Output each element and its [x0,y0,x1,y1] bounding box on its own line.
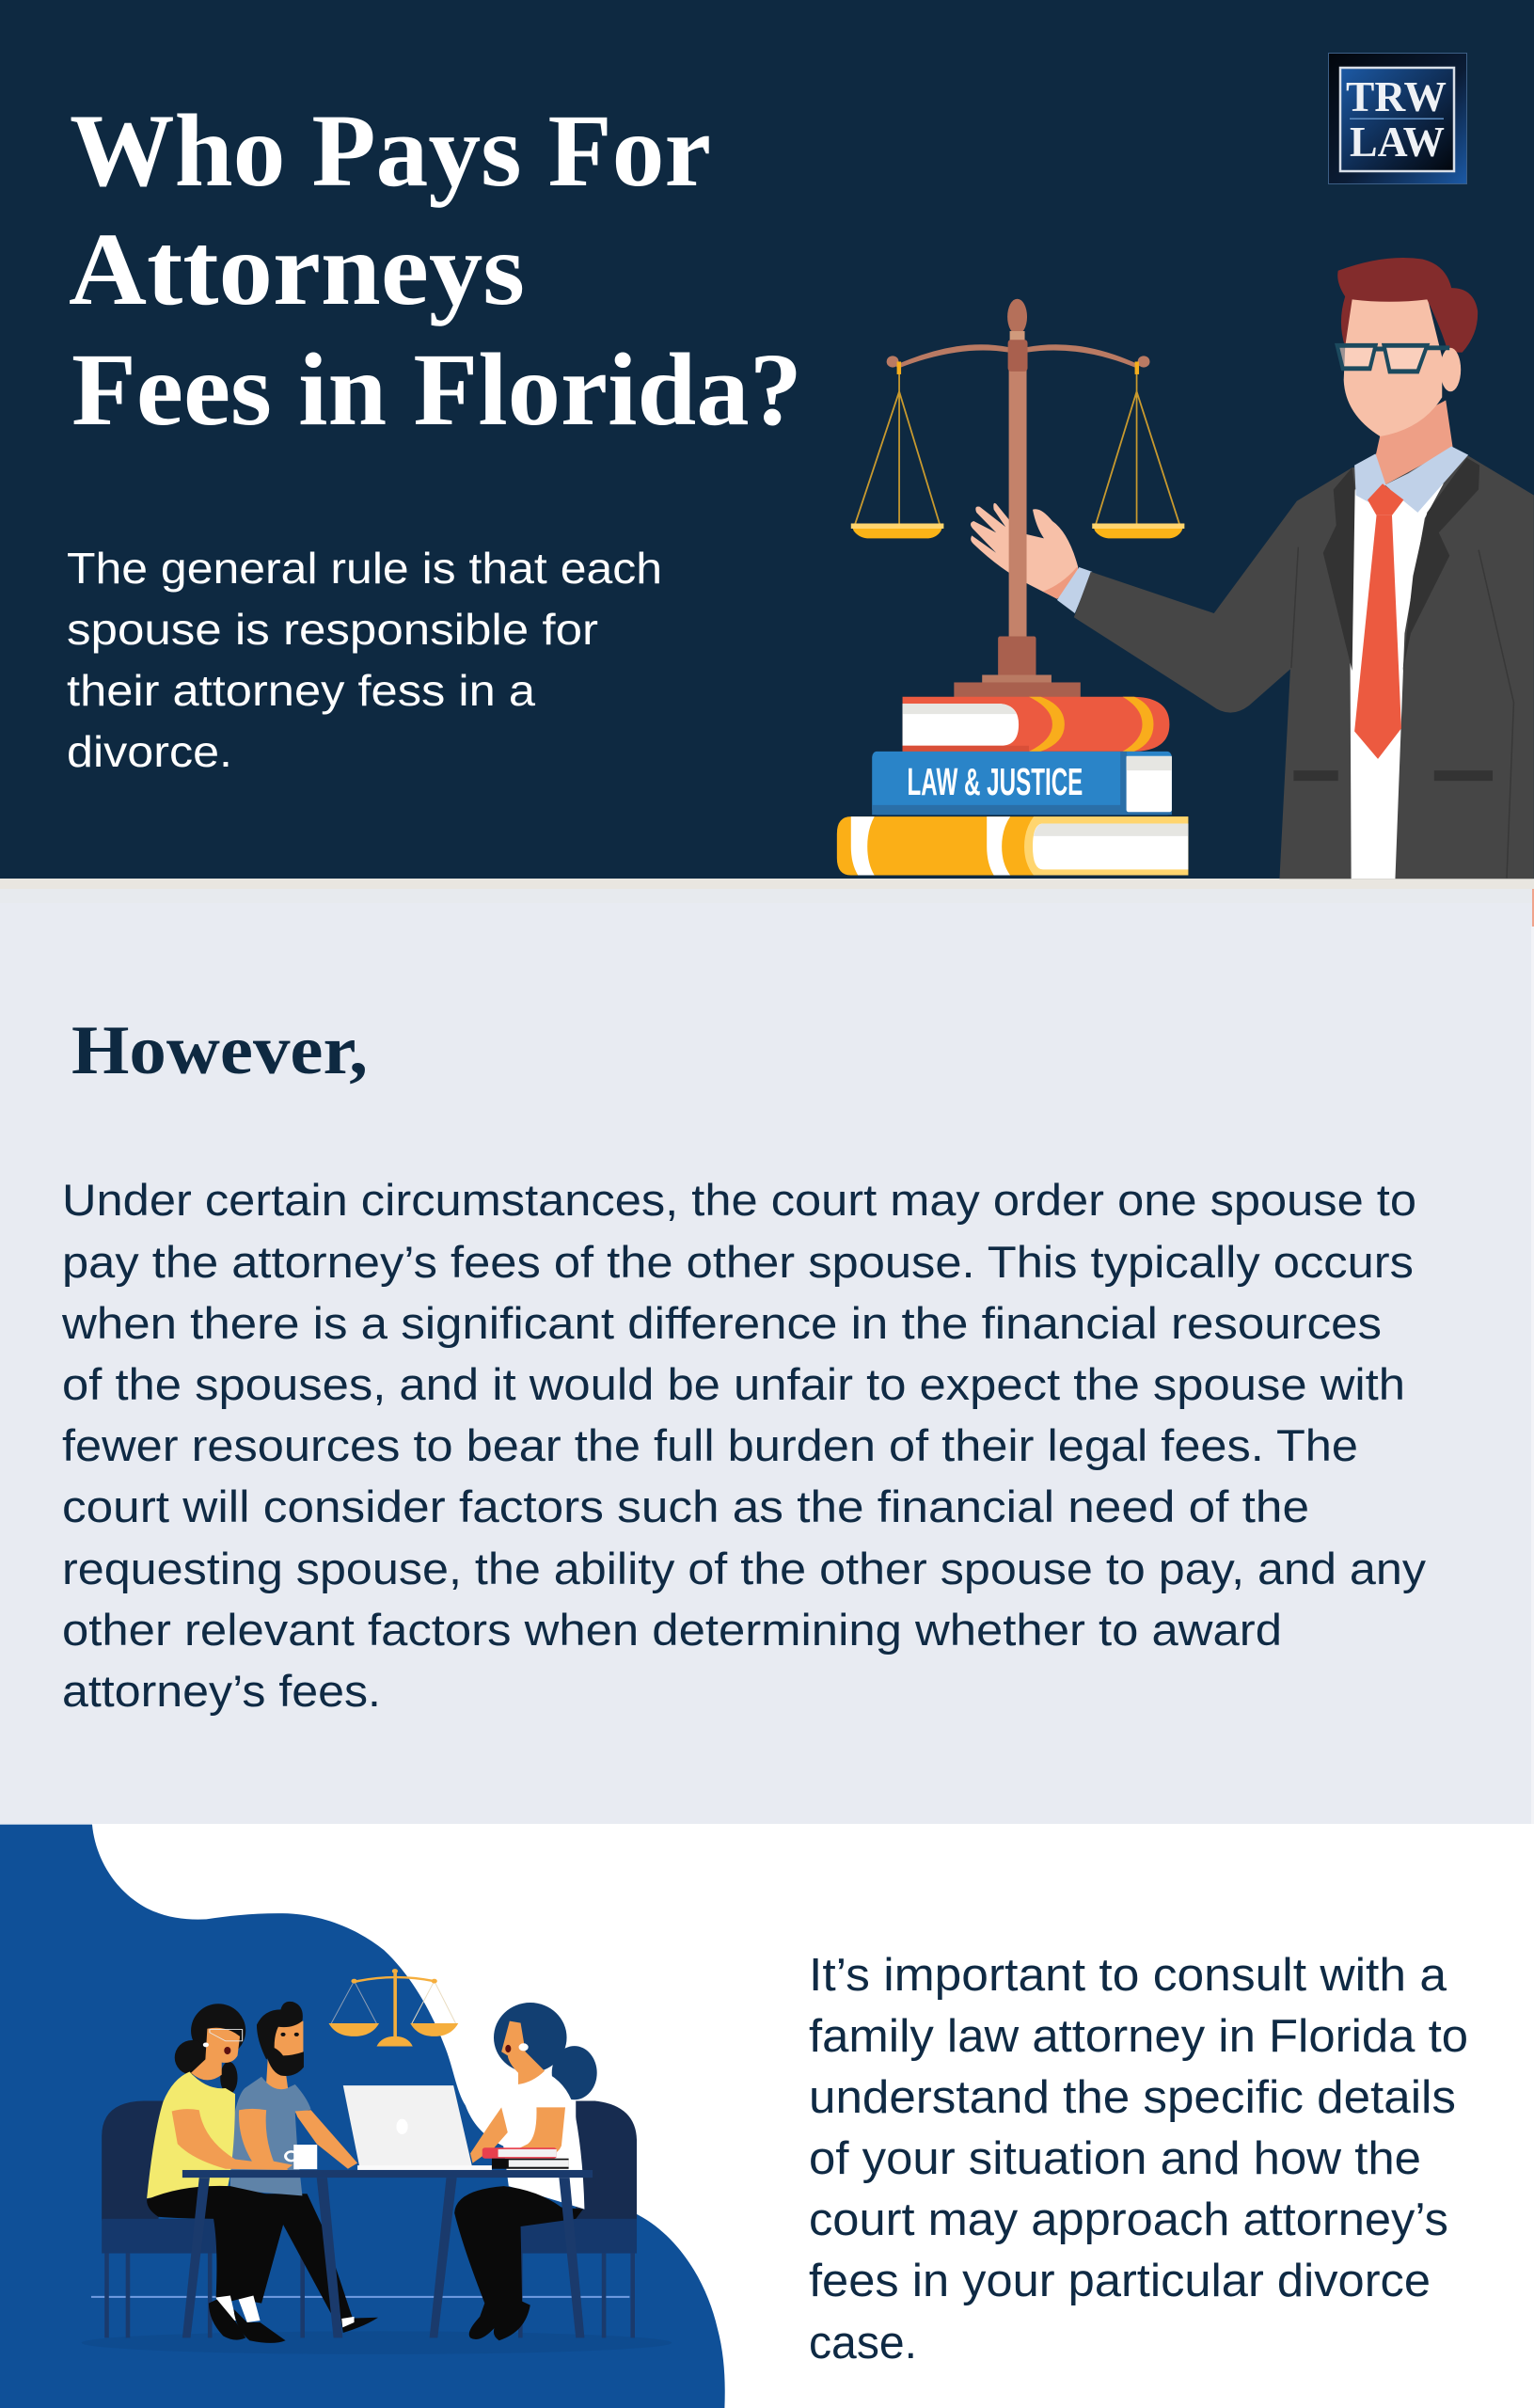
logo: TRW Law [1328,53,1467,184]
paragraph: consult a family law attorney: of your situation and how the [809,2133,1421,2184]
title: Attorneys [69,212,525,326]
paragraph: court may order fees: of the spouses, and it would be unfair to expect the spouse with [62,1360,1405,1410]
chair: left [102,2100,305,2337]
panel: however section background [0,879,1534,1824]
figure: man with beard [230,2002,378,2333]
intro text block [67,544,662,776]
paragraph: court may order fees: requesting spouse, the ability of the other spouse to pay, and any [62,1545,1426,1594]
icon: presenting hand [971,503,1092,613]
panel: header background [0,0,1534,879]
paragraph: consult a family law attorney: court may approach attorney’s [809,2194,1448,2245]
coffee mug [286,2145,317,2169]
paragraph: court may order fees: court will consider factors such as the financial need of the [62,1482,1309,1532]
title [69,93,802,447]
paragraph: court may order fees: other relevant factors when determining whether to award [62,1606,1282,1656]
book: blue, Law and Justice: LAW & JUSTICE [908,761,1083,803]
figure: attorney [1074,258,1534,879]
figure: attorney woman in white [454,2003,597,2340]
floor line and shadow [82,2296,672,2354]
stack of books [482,2147,569,2169]
paragraph: court may order fees: Under certain circumstances, the court may order one spouse to [62,1176,1416,1226]
illustration: attorney, scales and books [837,258,1534,879]
intro text block: divorce. [67,727,232,776]
paragraph: consult a family law attorney [809,1950,1468,2368]
intro text block: their attorney fess in a [67,666,535,715]
illustration: consultation at a table [0,1825,725,2408]
icon: scales of justice [851,299,1184,698]
paragraph: court may order fees: fewer resources to bear the full burden of their legal fees. The [62,1421,1358,1471]
table [182,2170,593,2337]
logo: TRW Law: LAW [1350,119,1445,166]
book: red [903,697,1169,752]
laptop [343,2085,492,2170]
paragraph: court may order fees: attorney’s fees. [62,1667,381,1717]
panel: footer background [0,1824,1534,2408]
logo: TRW Law: TRW [1346,73,1447,120]
heading: However: However, [71,1012,368,1089]
chair: right [518,2100,637,2337]
paragraph: court may order fees: when there is a significant difference in the financial resources [61,1299,1382,1349]
background blob [0,1825,725,2408]
paragraph: consult a family law attorney: case. [809,2318,917,2368]
paragraph: consult a family law attorney: understand the specific details [809,2072,1456,2123]
icon: small scales [328,1969,458,2047]
title: Who Pays For [70,93,711,208]
intro text block: spouse is responsible for [67,605,598,654]
paragraph: court may order fees: pay the attorney’s fees of the other spouse. This typically occurs [62,1238,1414,1288]
paragraph: court may order fees [61,1176,1426,1717]
intro text block: The general rule is that each [67,544,662,593]
paragraph: consult a family law attorney: family law attorney in Florida to [809,2011,1468,2062]
book: yellow [837,816,1188,876]
paragraph: consult a family law attorney: fees in your particular divorce [809,2256,1431,2306]
title: Fees in Florida? [71,332,802,447]
paragraph: consult a family law attorney: It’s important to consult with a [809,1950,1447,2001]
figure: woman in yellow shirt [147,2004,288,2343]
book: blue, Law and Justice [872,752,1172,815]
